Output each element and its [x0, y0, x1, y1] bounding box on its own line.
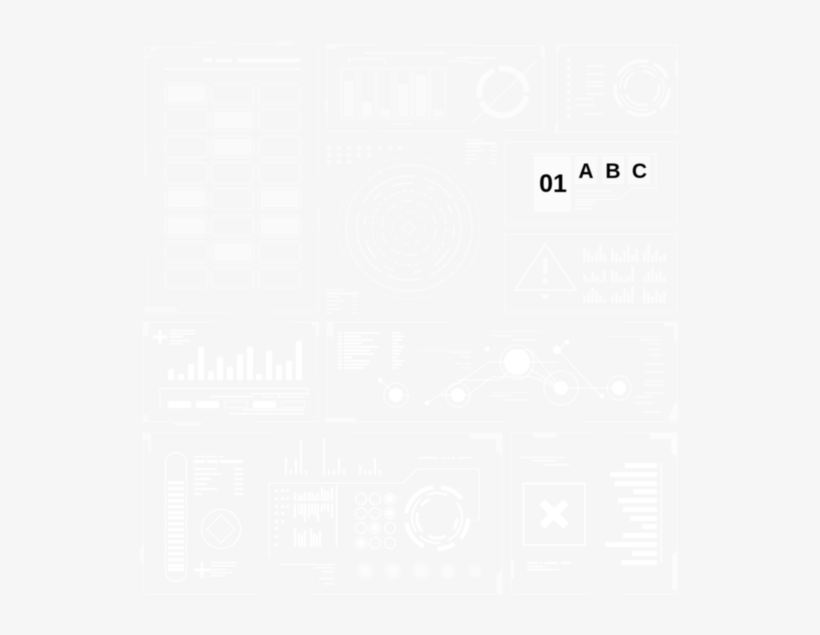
network line chart	[378, 340, 631, 407]
spike charts	[285, 438, 381, 475]
label box: C	[628, 156, 650, 184]
icon: plus	[153, 330, 167, 344]
panel: warning and bars	[505, 234, 677, 312]
soft indicator knobs	[356, 562, 482, 580]
horizontal bar list	[605, 463, 662, 565]
control strip	[160, 388, 308, 414]
bar chart rows	[583, 243, 666, 303]
panel: controls lower centre	[140, 433, 502, 594]
panel: bar chart lower left	[143, 322, 319, 426]
readout lines	[576, 65, 604, 115]
table header	[165, 58, 300, 70]
icon: X box	[524, 484, 585, 545]
panel: network timeline	[326, 322, 678, 422]
caption above box	[521, 457, 569, 466]
top caption lines	[365, 52, 496, 64]
icon: plus small	[194, 562, 237, 578]
panel: error X and bars	[511, 433, 677, 594]
indicator dots	[566, 58, 570, 118]
panel: 01 A B C labels	[505, 142, 677, 225]
annotation lines	[417, 331, 663, 413]
bars	[168, 341, 302, 380]
data text block upper right	[465, 139, 497, 164]
caption lines	[281, 457, 471, 584]
capsule gauge	[166, 452, 186, 582]
icon: diamond dial	[202, 510, 240, 548]
column gauges	[342, 59, 446, 124]
caption lines	[575, 190, 615, 210]
label box: C: C	[632, 160, 647, 183]
label box: B: B	[605, 160, 621, 183]
segmented ring	[406, 487, 468, 549]
table cells	[166, 84, 300, 288]
data text block lower left	[326, 289, 358, 314]
inner bracket frame	[269, 469, 479, 558]
text list: capsule	[194, 456, 243, 495]
legend lines	[170, 330, 195, 344]
circle button grid	[356, 494, 396, 548]
panel: radial ring and readout	[555, 45, 678, 133]
radar circle	[338, 157, 480, 299]
panel: data table	[143, 41, 320, 313]
donut gauge	[471, 60, 537, 124]
radial ring	[615, 61, 669, 115]
label box: A	[575, 156, 597, 184]
dot grid and equalizer	[275, 485, 338, 547]
label box: 01	[534, 156, 571, 212]
panel: column gauges and donut	[325, 45, 545, 131]
label box: 01: 01	[539, 170, 567, 198]
label box: B	[602, 156, 624, 184]
dot matrix	[327, 146, 402, 164]
caption below box	[527, 562, 571, 570]
warning triangle icon	[515, 244, 576, 300]
label box: A: A	[578, 160, 594, 183]
text list	[338, 332, 404, 369]
